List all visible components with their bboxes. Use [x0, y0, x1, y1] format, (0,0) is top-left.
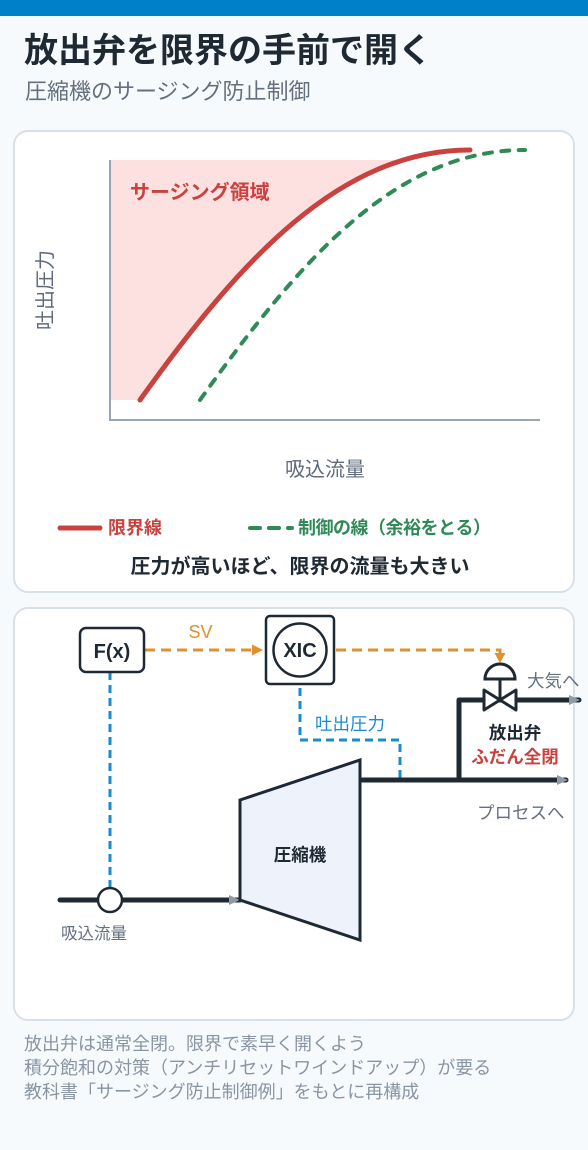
surge region label: サージング領域: [130, 180, 270, 204]
x axis label: 吸込流量: [285, 458, 365, 481]
suction flow label: 吸込流量: [61, 924, 127, 943]
limit curve: [140, 150, 470, 400]
chart axes: [110, 160, 540, 420]
y axis label: 吐出圧力: [34, 250, 57, 330]
compressor: 圧縮機: [274, 845, 327, 865]
F(x) block: [80, 628, 144, 672]
surge region fill: [111, 160, 395, 400]
flow sensor: [98, 888, 122, 912]
subtitle: 圧縮機のサージング防止制御: [25, 79, 311, 104]
to atmosphere label: 大気へ: [527, 671, 580, 691]
F(x) block: F(x): [94, 641, 130, 663]
signal: discharge pressure to XIC: [300, 688, 400, 780]
signal: XIC to valve: [336, 650, 506, 663]
XIC controller: XIC: [283, 640, 317, 662]
signal: setpoint SV: SV: [188, 622, 213, 642]
discharge pressure label: 吐出圧力: [315, 714, 385, 734]
legend: control line: 制御の線（余裕をとる）: [298, 518, 490, 538]
panel: surge chart: [14, 131, 574, 592]
valve status label: ふだん全閉: [471, 747, 559, 767]
XIC controller: [266, 616, 334, 684]
footer notes: 教科書「サージング防止制御例」をもとに再構成: [24, 1082, 419, 1102]
top accent bar: [0, 0, 588, 16]
signal: setpoint SV: [145, 622, 263, 656]
discharge pipes: [360, 695, 580, 785]
to process label: プロセスへ: [477, 803, 564, 823]
control curve: [200, 150, 525, 400]
blow-off valve: [484, 664, 516, 710]
legend: limit line: [60, 518, 162, 538]
valve name label: 放出弁: [489, 723, 541, 743]
panel: process diagram: [14, 608, 580, 1020]
legend: limit line: 限界線: [108, 518, 162, 538]
title: 放出弁を限界の手前で開く: [24, 32, 432, 70]
footer notes: [24, 1034, 491, 1102]
chart note: 圧力が高いほど、限界の流量も大きい: [130, 554, 470, 578]
footer notes: 積分飽和の対策（アンチリセットワインドアップ）が要る: [24, 1057, 491, 1078]
suction pipe: [60, 895, 240, 905]
footer notes: 放出弁は通常全閉。限界で素早く開くよう: [24, 1034, 366, 1054]
compressor: [240, 760, 360, 940]
signal: flow to F(x): [108, 672, 112, 888]
